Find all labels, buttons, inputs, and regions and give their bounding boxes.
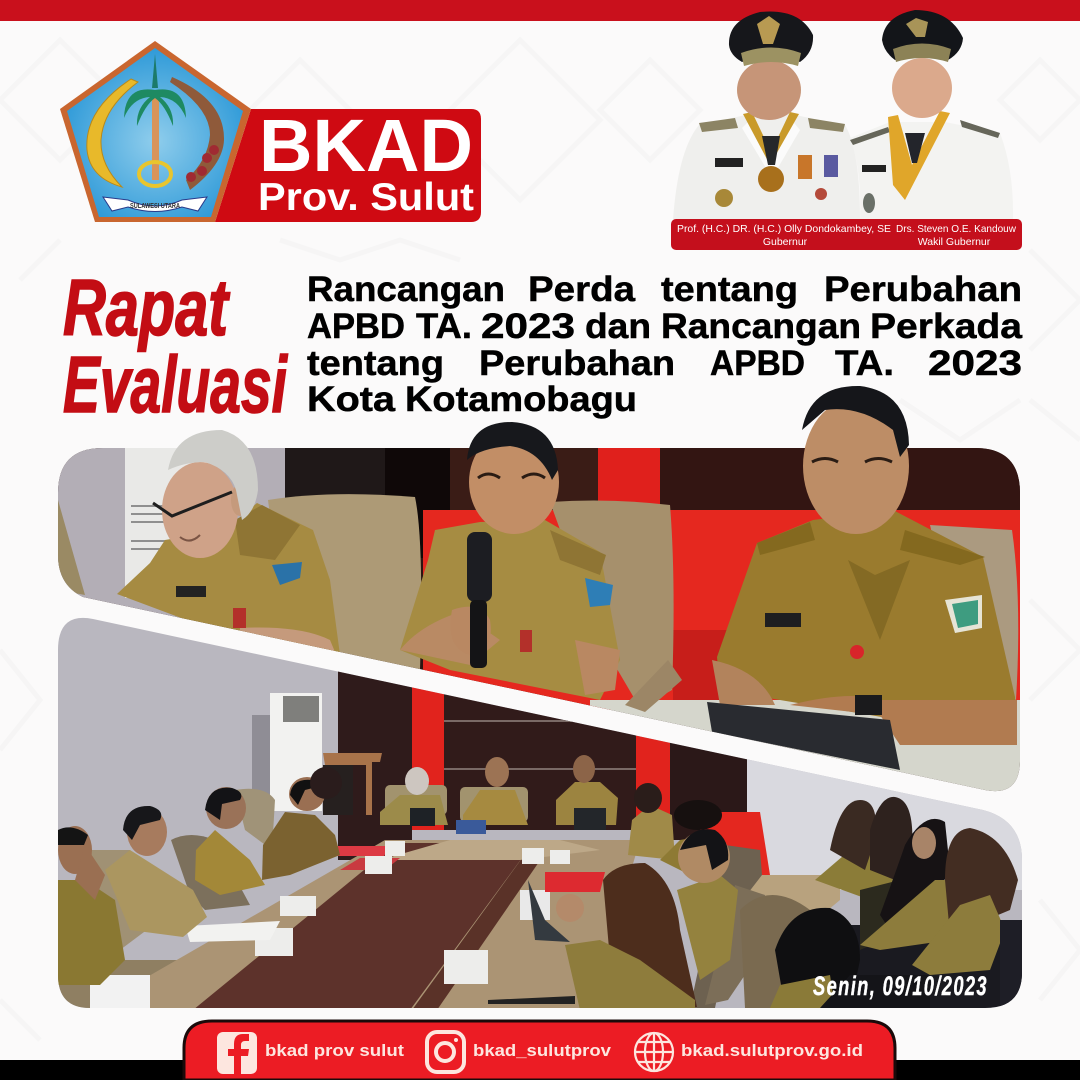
- photo date caption: Senin, 09/10/2023: [813, 971, 988, 1001]
- top red bar: [0, 0, 1080, 21]
- heading: Rapat Evaluasi: Evaluasi: [63, 340, 288, 429]
- label: instagram: bkad_sulutprov: [473, 1041, 612, 1060]
- banner subtitle: Prov. Sulut: [258, 176, 474, 219]
- conference table: [90, 840, 640, 1010]
- air conditioner: [252, 693, 322, 811]
- emblem ribbon: SULAWESI UTARA: [130, 203, 180, 210]
- subject text block: Perkada: [870, 307, 1023, 346]
- banner title: BKAD: [259, 104, 473, 187]
- emblem: North Sulawesi crest: [60, 41, 251, 222]
- photo background: [58, 448, 1020, 800]
- caption band: names and titles: [671, 219, 1022, 250]
- portrait: governor: [673, 11, 860, 220]
- caption band: names and titles: Gubernur: [763, 236, 808, 248]
- subject text block: TA.: [416, 307, 472, 346]
- chair backs: [58, 494, 1018, 712]
- subject text block: Kotamobagu: [405, 380, 637, 419]
- right side attendees: [556, 783, 1022, 1010]
- footer: social media panel: [184, 1021, 895, 1080]
- label: facebook: bkad prov sulut: [265, 1041, 404, 1060]
- subject text block: Perubahan: [824, 270, 1022, 309]
- photo: three officials at the meeting: [58, 386, 1020, 800]
- label: website: bkad.sulutprov.go.id: [681, 1041, 863, 1060]
- red name banner: [215, 109, 481, 222]
- icon: instagram: [427, 1032, 464, 1072]
- subject text block: Perubahan: [479, 344, 675, 383]
- left row of attendees: [58, 767, 342, 985]
- subject text block: Perda: [528, 270, 636, 309]
- governor portraits: [671, 10, 1022, 250]
- subject text block: [307, 270, 1023, 419]
- bottom black strip: [0, 1060, 1080, 1080]
- portrait: vice governor: [850, 10, 1013, 220]
- subject text block: TA.: [835, 344, 894, 383]
- subject text block: APBD: [307, 307, 405, 346]
- logo: BKAD Prov. Sulut: [60, 41, 481, 222]
- head-table trio: [380, 755, 618, 834]
- photo: meeting room overview: [58, 610, 1022, 1010]
- icon: facebook: [217, 1032, 257, 1074]
- caption band: names and titles: Drs. Steven O.E. Kandouw: [896, 223, 1016, 235]
- subject text block: tentang: [661, 270, 798, 309]
- subject text block: 2023: [928, 344, 1022, 383]
- subject text block: tentang: [307, 344, 444, 383]
- subject text block: Rancangan: [661, 307, 861, 346]
- caption band: names and titles: Prof. (H.C.) DR. (H.C.) Olly Dondokambey, SE: [677, 223, 891, 235]
- official right with tablet: [707, 386, 1017, 770]
- room wall: [58, 610, 1022, 1010]
- heading: Rapat Evaluasi: Rapat: [63, 263, 230, 352]
- official centre with microphone: [400, 422, 620, 700]
- emblem ribbon: [103, 197, 207, 212]
- subject text block: dan: [585, 307, 651, 346]
- official left: [117, 430, 340, 655]
- subject text block: Kota: [307, 380, 396, 419]
- side table: [323, 753, 382, 815]
- subject text block: APBD: [710, 344, 805, 383]
- subject text block: 2023: [481, 307, 575, 346]
- heading: Rapat Evaluasi: [63, 263, 288, 429]
- seated officials: [117, 386, 1017, 770]
- subject text block: Rancangan: [307, 270, 505, 309]
- icon: website globe: [635, 1033, 673, 1071]
- caption band: names and titles: Wakil Gubernur: [918, 236, 991, 248]
